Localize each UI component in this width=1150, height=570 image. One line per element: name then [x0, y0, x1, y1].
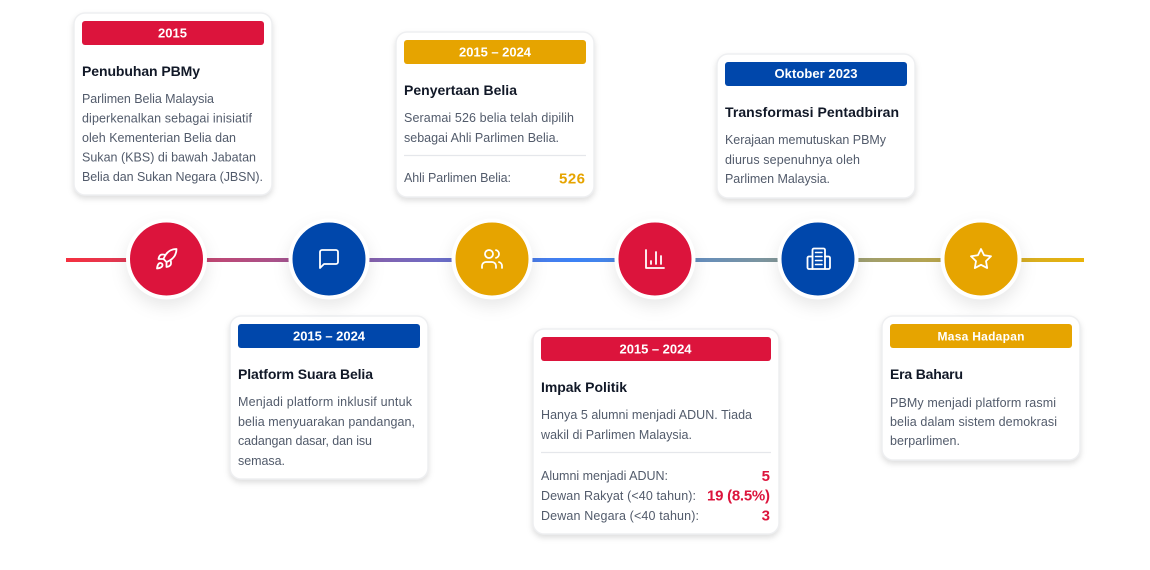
card: Platform Suara Belia: cadangan dasar, dan isu — [238, 434, 372, 448]
card: Era Baharu: belia dalam sistem demokrasi — [890, 415, 1057, 429]
card: Transformasi Pentadbiran — [717, 54, 915, 198]
card: Penubuhan PBMy — [74, 13, 272, 195]
card: Transformasi Pentadbiran: Kerajaan memutuskan PBMy — [725, 133, 887, 147]
timeline line — [66, 258, 1084, 262]
card: Platform Suara Belia: belia menyuarakan pandangan, — [238, 415, 415, 429]
card: Impak Politik — [533, 329, 779, 534]
card: Platform Suara Belia — [230, 316, 428, 479]
card: Penubuhan PBMy: Sukan (KBS) di bawah Jabatan — [82, 150, 256, 164]
card: Penubuhan PBMy: oleh Kementerian Belia dan — [82, 131, 236, 145]
card: Penubuhan PBMy: Parlimen Belia Malaysia — [82, 92, 214, 106]
card: Penyertaan Belia: 526 — [559, 170, 585, 188]
card: Era Baharu: Era Baharu — [890, 366, 963, 382]
card: Penyertaan Belia: sebagai Ahli Parlimen Belia. — [404, 131, 559, 145]
card: Platform Suara Belia: semasa. — [238, 454, 285, 468]
icon: rocket — [157, 249, 176, 268]
card: Transformasi Pentadbiran: Transformasi Pentadbiran — [725, 104, 899, 120]
card: Impak Politik: Hanya 5 alumni menjadi ADUN. Tiada — [541, 408, 752, 422]
card: Era Baharu: PBMy menjadi platform rasmi — [890, 396, 1056, 410]
node: users — [454, 220, 530, 298]
card: Penyertaan Belia — [396, 32, 594, 197]
card: Impak Politik: 2015 – 2024 — [620, 342, 692, 356]
card: Impak Politik: Dewan Negara (<40 tahun): — [541, 509, 699, 523]
card: Transformasi Pentadbiran: Oktober 2023 — [774, 66, 858, 81]
icon: users — [482, 250, 502, 268]
card: Impak Politik: wakil di Parlimen Malaysia. — [540, 428, 692, 442]
card: Impak Politik: Dewan Rakyat (<40 tahun): — [541, 489, 696, 503]
card: Penyertaan Belia: Seramai 526 belia telah dipilih — [404, 111, 574, 125]
card: Impak Politik: 19 (8.5%) — [707, 488, 770, 504]
card: Impak Politik: Alumni menjadi ADUN: — [541, 469, 668, 483]
card: Penubuhan PBMy: diperkenalkan sebagai inisiatif — [82, 112, 253, 126]
node: rocket — [128, 220, 205, 298]
card: Penubuhan PBMy: 2015 — [158, 26, 187, 40]
card: Platform Suara Belia: 2015 – 2024 — [293, 328, 366, 344]
card: Penubuhan PBMy: Belia dan Sukan Negara (JBSN). — [82, 170, 263, 184]
card: Impak Politik: Impak Politik — [541, 379, 627, 395]
card: Era Baharu: berparlimen. — [890, 434, 960, 448]
card: Penubuhan PBMy: Penubuhan PBMy — [82, 63, 200, 79]
card: Platform Suara Belia: Menjadi platform inklusif untuk — [238, 395, 413, 409]
node: building — [780, 220, 856, 298]
card: Era Baharu: Masa Hadapan — [938, 330, 1024, 344]
icon: building — [808, 248, 830, 269]
icon: message square — [320, 250, 338, 268]
card: Transformasi Pentadbiran: diurus sepenuhnya oleh — [725, 153, 860, 167]
card: Impak Politik: 3 — [762, 508, 770, 524]
card: Impak Politik: 5 — [762, 468, 770, 485]
card: Penyertaan Belia: 2015 – 2024 — [459, 44, 532, 60]
node: star — [942, 220, 1020, 298]
icon: star — [971, 249, 991, 268]
node: message — [290, 220, 368, 298]
card: Transformasi Pentadbiran: Parlimen Malaysia. — [725, 172, 830, 186]
card: Penyertaan Belia: Ahli Parlimen Belia: — [404, 171, 511, 185]
card: Penyertaan Belia: Penyertaan Belia — [404, 82, 517, 98]
node: bar chart — [616, 220, 694, 298]
icon: bar chart — [646, 250, 664, 268]
card: Era Baharu — [882, 316, 1080, 460]
card: Platform Suara Belia: Platform Suara Belia — [238, 366, 373, 382]
